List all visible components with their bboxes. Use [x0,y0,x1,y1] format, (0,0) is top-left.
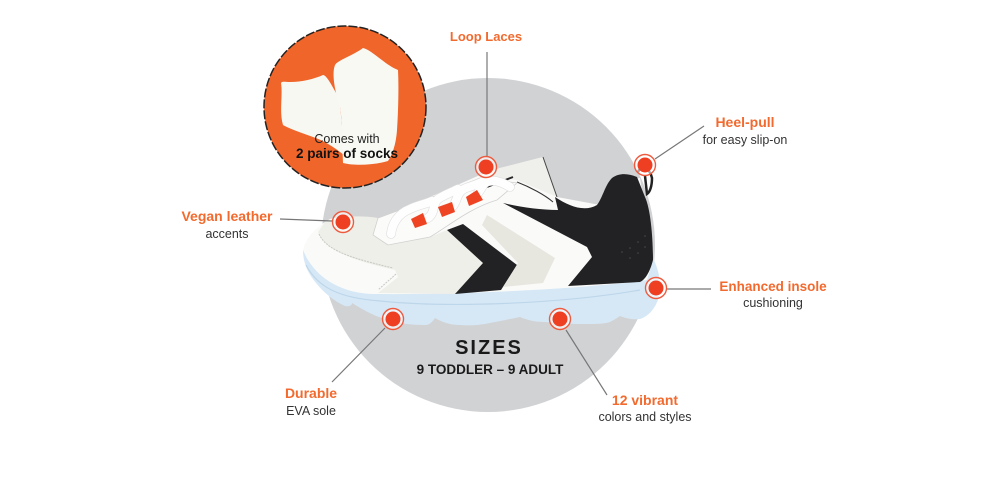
heel pull loop [638,168,652,194]
icon: left sock [281,75,344,155]
laces outline [391,181,510,234]
label: Vegan leather: Vegan leather [181,208,273,224]
label: 12 vibrant [598,392,692,424]
label: Vegan leather: accents [205,227,249,241]
black heel [503,174,653,286]
label: 12 vibrant: 12 vibrant [612,392,678,408]
label: Enhanced insole [719,279,827,310]
red lace tabs [411,190,483,228]
label: Heel-pull: for easy slip-on [703,133,787,147]
tongue edge [543,157,557,197]
mesh chevron [482,215,555,287]
sizes text: SIZES [455,337,523,359]
label: Vegan leather [181,208,273,241]
shoe upper [303,157,653,294]
toe mesh panel [318,216,483,294]
socks badge [264,26,426,188]
lace gap shadow [487,177,513,187]
laces [391,181,510,234]
label: Heel-pull: Heel-pull [715,114,775,130]
socks text: 2 pairs of socks [296,146,398,161]
label: Heel-pull [703,114,787,147]
label: Durable: EVA sole [286,404,336,418]
label: Enhanced insole: cushioning [743,296,803,310]
label: Loop Laces: Loop Laces [450,29,522,44]
label: 12 vibrant: colors and styles [598,410,692,424]
shoe sole [303,250,660,325]
lace eyestay [373,178,517,245]
label: Enhanced insole: Enhanced insole [719,279,827,294]
black chevron [447,224,517,294]
sizes text [417,337,564,377]
shoe illustration [303,157,660,325]
top panel outline [517,182,553,202]
socks text [296,132,398,161]
sizes text: 9 TODDLER – 9 ADULT [417,362,564,377]
icon: right sock [334,48,398,165]
leader lines [280,52,711,395]
heel perforations [621,235,646,259]
marker dots [332,154,666,330]
label: Durable: Durable [285,385,337,401]
gray background circle [321,78,655,412]
sole midline shading [306,265,640,304]
label: Durable [285,385,337,418]
toe cap stitching [319,234,396,290]
tongue mesh [480,157,557,197]
socks text: Comes with [314,132,380,146]
